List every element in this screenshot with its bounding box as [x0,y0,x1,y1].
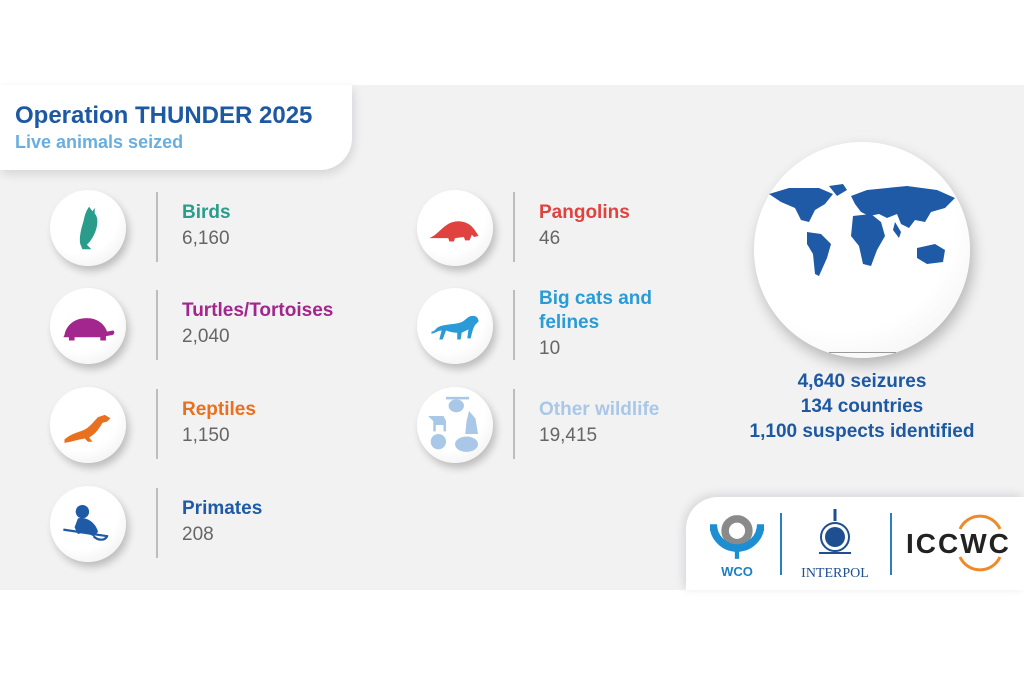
icon: pangolin [417,190,493,266]
label pangolins: Pangolins [539,202,630,223]
label turtles: Turtles/Tortoises [182,300,333,321]
icon: bird [50,190,126,266]
item: pangolins [416,190,630,274]
item: birds: 6,160 [182,228,230,249]
stats: 4,640 seizures [798,371,926,392]
title: Operation THUNDER 2025 [15,102,312,129]
item: turtles [50,288,333,372]
icon: iguana [50,387,126,463]
item: other wildlife: 19,415 [539,425,597,446]
item: big cats [416,288,652,372]
world map [769,184,955,276]
label big cats: Big cats and [539,288,652,309]
title box [0,85,352,170]
item: birds [50,190,231,274]
item: primates: 208 [182,524,214,545]
item: other wildlife [416,387,659,472]
logos box [686,497,1024,590]
label reptiles: Reptiles [182,399,256,420]
item: pangolins: 46 [539,228,560,249]
logo: WCO: WCO [721,564,753,579]
item: turtles: 2,040 [182,326,230,347]
stats [750,352,974,442]
stats: 1,100 suspects identified [750,421,974,442]
label primates: Primates [182,498,262,519]
label big cats [539,288,652,333]
icon: primate [50,486,126,562]
label other wildlife: Other wildlife [539,399,659,420]
logo: WCO [710,515,764,579]
logo: ICCWC [906,514,1011,572]
stats: 134 countries [801,396,923,417]
background panel [0,85,1024,590]
icon: turtle [50,288,126,364]
item: primates [50,486,262,570]
item: reptiles: 1,150 [182,425,230,446]
logo: INTERPOL [801,509,869,581]
item: big cats: 10 [539,338,560,359]
icon: other wildlife [417,387,493,463]
globe circle with world map [754,142,970,358]
subtitle: Live animals seized [15,132,183,152]
logo: ICCWC: ICCWC [906,528,1011,559]
logo: INTERPOL: INTERPOL [801,566,869,581]
item: reptiles [50,387,256,472]
icon: big cat [417,288,493,364]
label big cats: felines [539,312,599,333]
label birds: Birds [182,202,231,223]
